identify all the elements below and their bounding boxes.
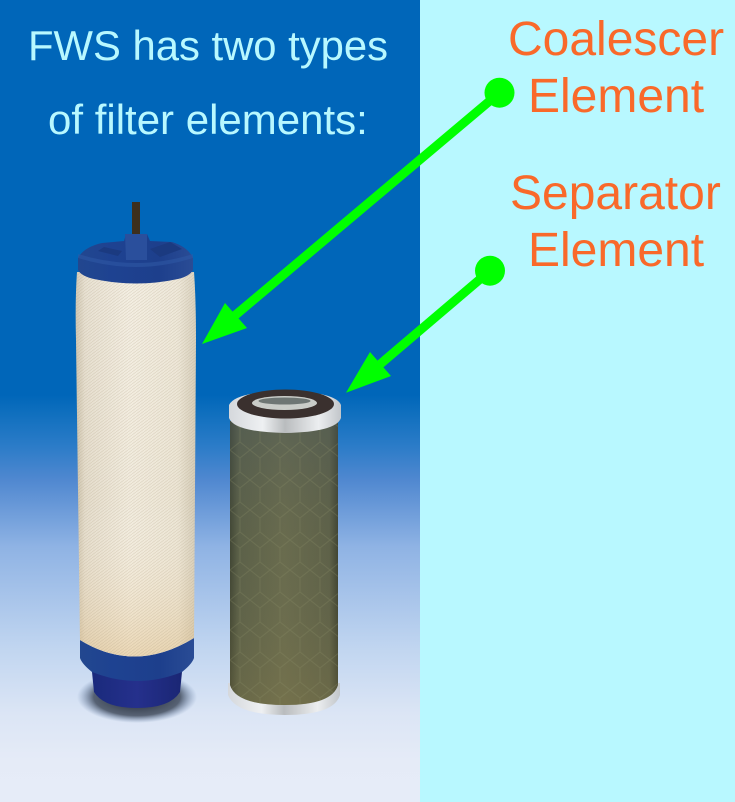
label: coalescer element: Coalescer [508, 13, 724, 66]
bottom band [80, 638, 194, 681]
panel: blue gradient background [0, 0, 420, 802]
olive body [230, 421, 338, 705]
separator filter element [228, 390, 341, 715]
bottom ring [228, 683, 340, 715]
heading line two: of filter elements: [48, 96, 368, 143]
beige body [76, 272, 196, 657]
coalescer filter element [76, 202, 197, 723]
heading line one: FWS has two types [28, 22, 388, 69]
arrow: coalescer pointer [202, 78, 514, 344]
black gasket [237, 390, 334, 418]
arrow: separator pointer [346, 256, 505, 393]
bottom foot [92, 672, 182, 708]
top cap [78, 234, 193, 284]
bolt [132, 202, 140, 235]
label: separator element second line: Element [528, 224, 704, 277]
label: separator element: Separator [510, 167, 721, 220]
top ring [229, 391, 341, 433]
label: coalescer element second line: Element [528, 70, 704, 123]
